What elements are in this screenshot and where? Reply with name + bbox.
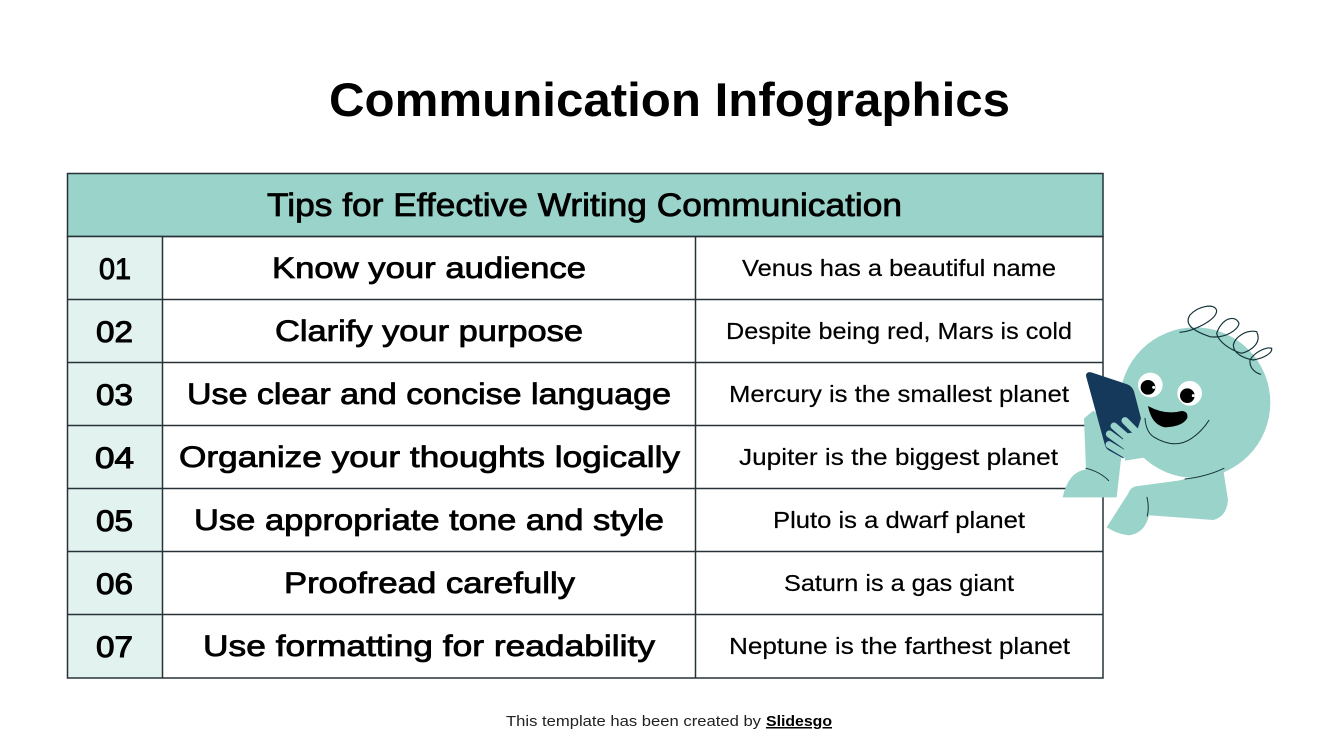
row 05	[96, 504, 1026, 538]
body and lower arm	[1107, 470, 1228, 535]
row 07: Use formatting for readability	[203, 630, 655, 663]
footer credit: Slidesgo	[766, 713, 832, 730]
table header	[68, 174, 1103, 236]
row 04: Organize your thoughts logically	[179, 441, 680, 474]
arm holding phone	[1063, 411, 1122, 497]
hair curl	[1180, 306, 1272, 374]
row 03: Mercury is the smallest planet	[729, 381, 1070, 407]
row 07	[96, 630, 1071, 664]
row 04	[95, 441, 1059, 475]
row 05: Pluto is a dwarf planet	[773, 507, 1026, 533]
phone	[1086, 372, 1141, 458]
table grid	[68, 236, 1103, 678]
row 06	[96, 567, 1015, 601]
row 03	[96, 378, 1070, 412]
row 04: Jupiter is the biggest planet	[739, 444, 1059, 470]
row 01	[99, 252, 1056, 286]
row 05: Use appropriate tone and style	[194, 504, 664, 537]
row 01: Venus has a beautiful name	[742, 255, 1056, 281]
mascot: character with phone	[1063, 306, 1272, 535]
row 01: Know your audience	[272, 252, 586, 285]
row 06: Proofread carefully	[284, 567, 575, 600]
table header: Tips for Effective Writing Communication	[267, 187, 902, 223]
row 05: 05	[96, 505, 133, 538]
row 02	[96, 315, 1072, 349]
row 07: Neptune is the farthest planet	[729, 633, 1071, 659]
row 06: Saturn is a gas giant	[784, 570, 1015, 596]
row 02: Despite being red, Mars is cold	[726, 318, 1072, 344]
hand	[1109, 421, 1150, 461]
row 03: 03	[96, 379, 133, 412]
row 06: 06	[96, 568, 133, 601]
row 02: 02	[96, 316, 133, 349]
eyes	[1138, 373, 1202, 406]
row 03: Use clear and concise language	[187, 378, 671, 411]
table: writing tips	[68, 174, 1103, 678]
footer credit: This template has been created by	[506, 713, 762, 730]
row 02: Clarify your purpose	[275, 315, 583, 348]
row 04: 04	[95, 442, 134, 475]
mouth	[1148, 406, 1187, 427]
head	[1120, 327, 1270, 478]
number column background	[68, 236, 162, 678]
row 07: 07	[96, 631, 133, 664]
row 01: 01	[99, 253, 131, 286]
title: Communication Infographics	[329, 73, 1010, 126]
smile and body lines	[1086, 418, 1224, 516]
